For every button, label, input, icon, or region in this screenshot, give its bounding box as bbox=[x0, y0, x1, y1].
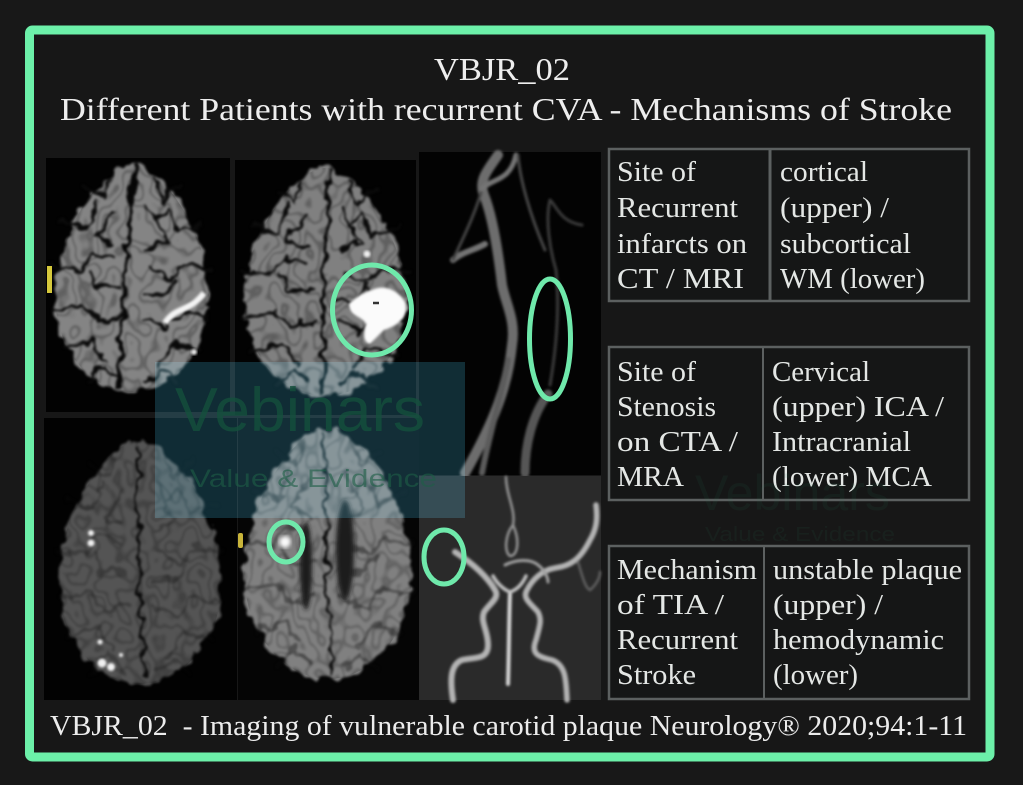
row label: MRA bbox=[617, 461, 684, 493]
yellow marker bbox=[238, 533, 243, 548]
row value: WM (lower) bbox=[780, 263, 925, 295]
row value: Intracranial bbox=[772, 426, 911, 458]
table: mechanism bbox=[609, 546, 969, 699]
faint table watermark: Value & Evidence bbox=[705, 524, 895, 546]
row value: (lower) bbox=[773, 659, 858, 691]
watermark: Vebinars bbox=[155, 362, 465, 518]
title: Different Patients with recurrent CVA - Mechanisms of Stroke bbox=[60, 91, 952, 127]
faint table watermark: Vebinars bbox=[695, 465, 890, 521]
row label: Mechanism bbox=[617, 554, 757, 586]
row label bbox=[617, 554, 757, 691]
row label: Stroke bbox=[617, 659, 696, 691]
row label: infarcts on bbox=[617, 228, 748, 260]
row label: on CTA / bbox=[617, 426, 739, 458]
row label: Recurrent bbox=[617, 624, 738, 656]
row label: Site of bbox=[617, 156, 696, 188]
table: site of recurrent infarcts bbox=[609, 149, 969, 301]
panel: cervical angiogram bbox=[419, 152, 601, 475]
row value bbox=[773, 554, 962, 691]
row value: Cervical bbox=[772, 356, 870, 388]
brain slice with subcortical lesion bbox=[240, 425, 416, 683]
panel: upper-middle brain scan bbox=[235, 160, 416, 415]
table: site of stenosis bbox=[609, 347, 969, 500]
row label bbox=[617, 156, 748, 295]
lateral ventricles bbox=[300, 500, 354, 610]
yellow marker bbox=[47, 266, 52, 293]
row label: of TIA / bbox=[617, 589, 725, 621]
row value: unstable plaque bbox=[773, 554, 962, 586]
row value: (upper) / bbox=[780, 192, 890, 224]
region rings bbox=[269, 265, 570, 584]
title bbox=[60, 51, 952, 127]
brain slice with cortical lesion bbox=[50, 160, 215, 395]
watermark: Vebinars: Value & Evidence bbox=[190, 465, 437, 493]
cerebral arteries bbox=[451, 477, 600, 700]
row value: (upper) ICA / bbox=[772, 391, 945, 423]
row label bbox=[617, 356, 739, 493]
row label: CT / MRI bbox=[617, 263, 744, 295]
title: VBJR_02 bbox=[434, 51, 570, 87]
panel: upper-left brain scan bbox=[46, 158, 230, 412]
panel: lower-middle brain scan bbox=[238, 418, 419, 700]
brain slice with large lesion bbox=[240, 165, 410, 400]
row label: Stenosis bbox=[617, 391, 716, 423]
row label: Site of bbox=[617, 356, 696, 388]
row value: (lower) MCA bbox=[772, 461, 932, 493]
watermark: Vebinars: Vebinars bbox=[175, 376, 425, 445]
footer citation: VBJR_02 - Imaging of vulnerable carotid plaque Neurology® 2020;94:1-11 bbox=[50, 710, 967, 742]
row value bbox=[780, 156, 925, 295]
row value: hemodynamic bbox=[773, 624, 944, 656]
carotid vessels bbox=[453, 155, 582, 473]
faint table watermark bbox=[695, 465, 895, 546]
row label: Recurrent bbox=[617, 192, 738, 224]
panel: lower-left brain scan bbox=[44, 418, 237, 700]
row value: (upper) / bbox=[773, 589, 884, 621]
row value bbox=[772, 356, 945, 493]
panel: intracranial angiogram bbox=[419, 476, 601, 700]
row value: subcortical bbox=[780, 228, 911, 260]
brain slice with scattered infarcts bbox=[50, 435, 230, 690]
row value: cortical bbox=[780, 156, 868, 188]
